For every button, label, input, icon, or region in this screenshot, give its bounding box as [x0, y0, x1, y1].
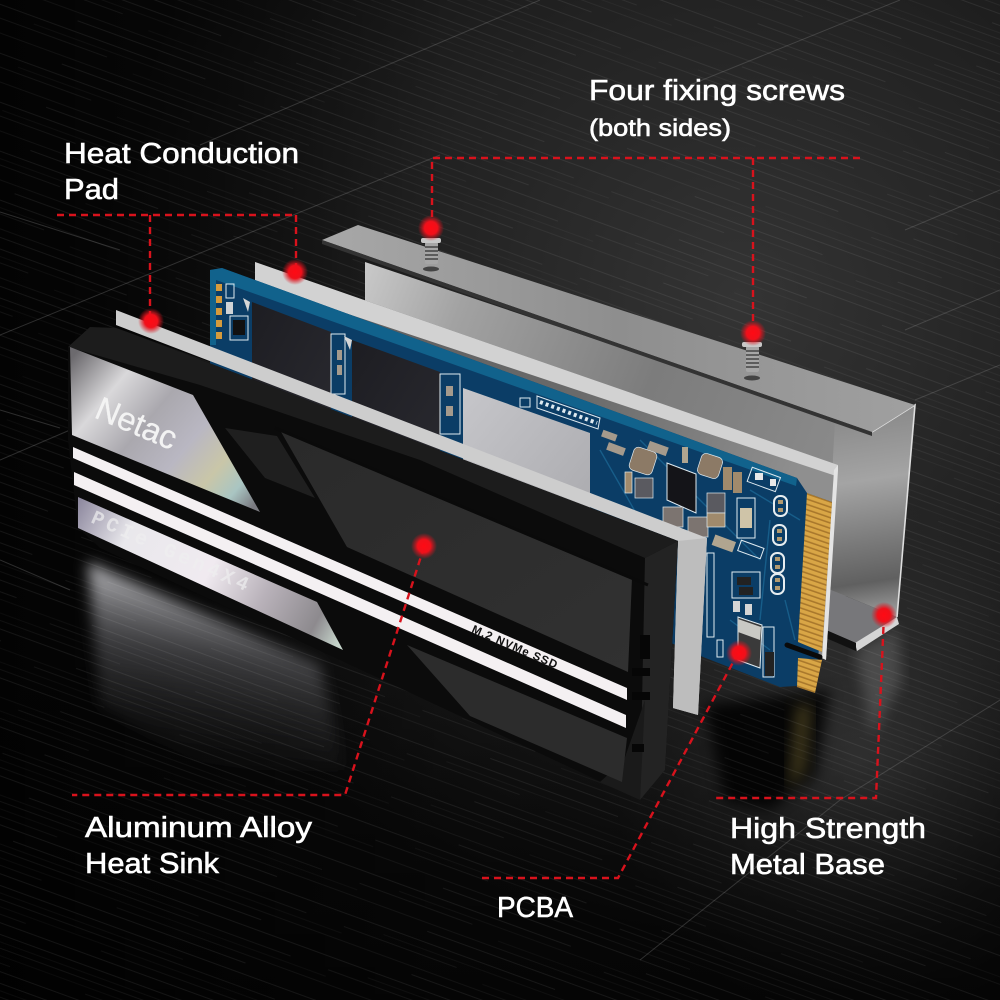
NAND chip 1: [252, 302, 331, 450]
callout: four fixing screws: Four fixing screws: [589, 75, 845, 107]
connector notch: [787, 645, 820, 657]
board: [210, 268, 832, 693]
aluminum alloy heat sink: [68, 327, 678, 800]
PCBA: [210, 268, 832, 693]
heat sink base shape: [68, 327, 678, 800]
white stripe 2: [74, 472, 626, 728]
left edge pads: [216, 284, 222, 339]
reflection under heat sink: [88, 562, 345, 770]
reflection under pcb and base: [705, 628, 902, 810]
gold fingers upper: [798, 493, 832, 652]
grey IC packages: [625, 472, 725, 537]
silver plate with logo: [70, 347, 260, 512]
callout: four fixing screws: (both sides): [589, 115, 731, 142]
callout: aluminum alloy heat sink: Aluminum Alloy: [85, 812, 313, 844]
circuit traces: [600, 440, 800, 650]
controller chip: [667, 463, 696, 513]
DRAM silver chip: [463, 388, 590, 545]
callout: heat conduction pad: Pad: [64, 174, 119, 206]
callout: high strength metal base: High Strength: [730, 813, 926, 845]
screw: right: [742, 342, 762, 380]
callout: aluminum alloy heat sink: [72, 533, 437, 880]
PCIe Gen4x4 label: PCIe Gen4X4: [87, 507, 252, 598]
callout: PCBA: PCBA: [497, 892, 574, 924]
Netac logo: Netac: [90, 389, 183, 457]
rear heat conduction pad: [255, 262, 838, 660]
power chip: [738, 617, 774, 676]
gold fingers lower: [797, 658, 822, 693]
callout: heat conduction pad: Heat Conduction: [64, 138, 299, 170]
top connector row: [520, 396, 626, 456]
inner wedge: [225, 428, 315, 498]
base top flange: [322, 225, 915, 432]
side fin block: [640, 541, 678, 800]
inductors: [628, 446, 724, 480]
callout: PCBA: [480, 640, 752, 924]
via pads column: [771, 496, 787, 594]
raised lower trapezoid: [407, 645, 627, 782]
base inner wall: [365, 262, 872, 600]
metal base: [322, 225, 915, 651]
callout: aluminum alloy heat sink: Heat Sink: [85, 848, 220, 880]
front heat conduction pad: [116, 310, 707, 715]
small parts left: [226, 284, 460, 434]
small passive components: [647, 441, 780, 677]
raised upper trapezoid: [280, 430, 632, 672]
NAND chip 2: [352, 340, 440, 480]
callout: high strength metal base: Metal Base: [730, 849, 885, 881]
base side wall: [826, 405, 915, 617]
screw: left: [421, 238, 441, 272]
callout: high strength metal base: [716, 602, 926, 881]
white stripe 1: [73, 447, 627, 700]
silver plate with PCIe text: [78, 497, 343, 650]
base foot: [826, 588, 897, 643]
M.2 NVMe SSD label: M.2 NVMe SSD: [470, 624, 559, 671]
callout: four fixing screws: [418, 75, 860, 346]
callout: heat conduction pad: [57, 138, 308, 334]
